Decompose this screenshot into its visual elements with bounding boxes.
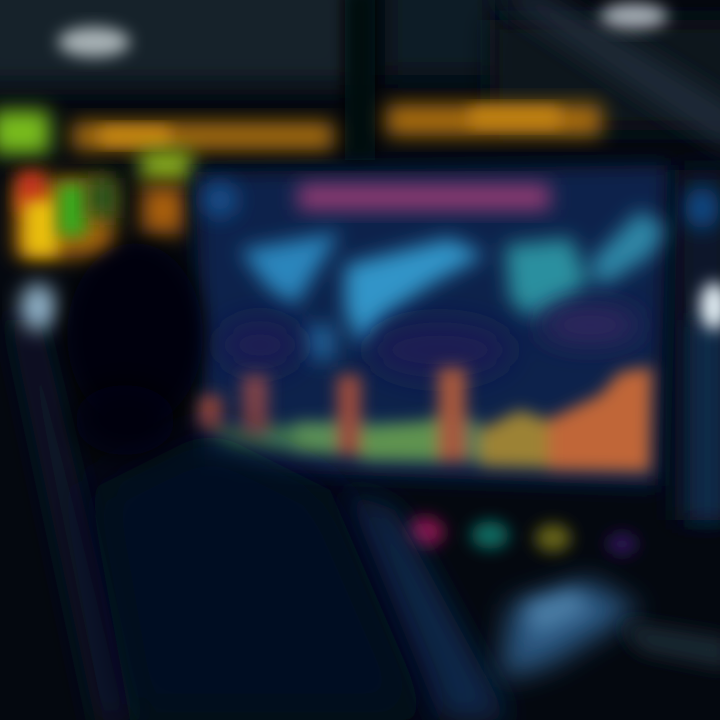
purple dark patches over the map: [220, 307, 640, 378]
ceiling lights: [58, 3, 668, 57]
world map: [240, 210, 666, 360]
bars and area chart: [198, 367, 652, 472]
keyboard and desk: [345, 490, 720, 720]
main monitor: [195, 165, 668, 486]
person silhouette: [67, 243, 430, 720]
dashboard heading bar: [298, 184, 550, 210]
orange ticker panels: [72, 104, 602, 150]
legend dots below monitor: [406, 517, 637, 555]
green and yellow side chart: [0, 110, 192, 258]
corner icon: [202, 182, 238, 218]
side lights: [20, 187, 720, 331]
